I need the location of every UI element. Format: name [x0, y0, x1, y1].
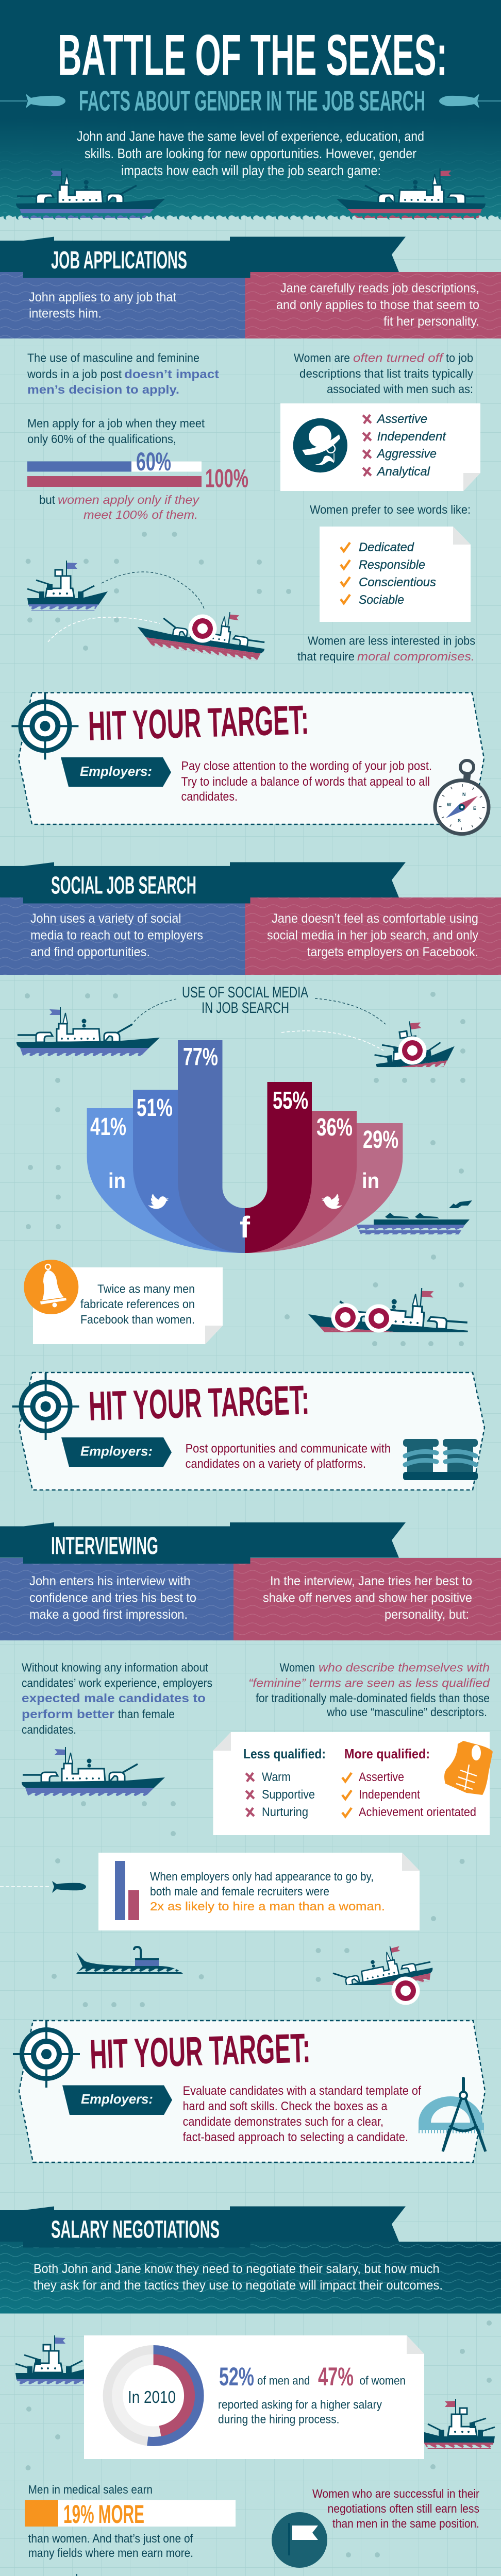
icon: target	[11, 692, 78, 759]
icon: red ship	[414, 2399, 495, 2449]
text: fabricated references: Twice as many men	[97, 1282, 195, 1295]
icon: compass: W	[447, 802, 452, 807]
heading: hit your target: HIT YOUR TARGET:	[88, 1377, 310, 1429]
text: employers advice: Evaluate candidates with a standard template of	[183, 2084, 421, 2098]
chart value labels	[90, 1044, 398, 1154]
panel: John interview: make a good first impression.	[29, 1607, 188, 1622]
text: masculine and feminine words: doesn’t impact	[124, 367, 219, 381]
text: feminine terms: who describe themselves with	[319, 1661, 490, 1674]
women: Twitter 36%	[245, 1111, 357, 1253]
card: masculine traits	[280, 403, 480, 491]
text: employers advice	[181, 759, 432, 804]
text: women earn less: than men in the same position.	[332, 2517, 479, 2530]
text: male candidates expected: Without knowing any information about	[22, 1661, 208, 1674]
tag: employers	[62, 2086, 172, 2115]
icon: protractor and dividers	[419, 2078, 486, 2151]
tag: employers: Employers:	[80, 1443, 153, 1459]
tag: employers	[61, 757, 171, 787]
text: 52 and 47 percent: reported asking for a higher salary	[218, 2398, 382, 2411]
text: appearance statistic: 2x as likely to hire a man than a woman.	[150, 1900, 385, 1913]
banner: interviewing: INTERVIEWING	[51, 1533, 158, 1560]
text: masculine and feminine words: men’s decision to apply.	[27, 383, 179, 396]
text: masculine and feminine words: The use of masculine and feminine	[27, 351, 199, 365]
text: masculine and feminine words: words in a job post	[27, 367, 122, 381]
text: feminine terms: who use “masculine” descriptors.	[326, 1705, 487, 1719]
panel: John social: John uses a variety of social	[30, 911, 181, 926]
icon: left torpedo	[0, 94, 65, 108]
text: women turned off: to job	[446, 351, 473, 365]
social platform icons	[108, 1168, 379, 1244]
panel: Jane applies: Jane carefully reads job descriptions,	[280, 281, 479, 296]
text: moral compromises: moral compromises.	[357, 650, 475, 663]
icon: sinking red ship	[333, 1946, 433, 2005]
panel: John applies: John applies to any job that	[29, 290, 176, 304]
text: women turned off: descriptions that list traits typically	[299, 367, 473, 380]
stat: men in medical sales: 19% MORE	[63, 2500, 144, 2529]
illustration: ship battle	[27, 561, 269, 662]
panel: Jane interview	[233, 1558, 501, 1640]
stat: men in medical sales: many fields where men earn more.	[28, 2546, 193, 2560]
panel: Jane applies: and only applies to those that seem to	[276, 298, 479, 312]
panel: John social: and find opportunities.	[30, 945, 150, 959]
panel: Jane applies	[245, 272, 501, 338]
card: preferred words	[320, 527, 471, 622]
tag: employers	[61, 1437, 172, 1467]
card: preferred words: Dedicated	[359, 540, 414, 554]
chart title: IN JOB SEARCH	[202, 999, 289, 1016]
women: Facebook 55%	[245, 1082, 312, 1253]
text: moral compromises	[297, 634, 475, 663]
list: masculine traits: Independent	[377, 430, 446, 444]
text: feminine terms: Women	[279, 1661, 315, 1674]
bar chart: 60% vs 100%: 100%	[205, 464, 248, 493]
card: preferred words: Conscientious	[359, 575, 436, 589]
icon: red ship	[337, 168, 486, 218]
panel: salary intro: they ask for and the tactics they use to negotiate will impact their outcomes.	[34, 2278, 443, 2293]
text: appearance statistic: both male and female recruiters were	[150, 1885, 329, 1898]
section: job applications	[0, 237, 501, 663]
panel: hit your target 1	[11, 692, 489, 834]
icon: sinking red ship with two hits	[308, 1288, 468, 1332]
icon: sinking red ship	[374, 1021, 455, 1067]
card: preferred words: Sociable	[359, 593, 404, 607]
chart: social media U chart	[87, 1040, 403, 1253]
arcs: shots	[134, 998, 386, 1050]
wave border	[0, 213, 501, 219]
donut chart	[108, 2350, 199, 2442]
panel: John interview	[0, 1558, 233, 1640]
panel: Jane social: targets employers on Facebook.	[307, 945, 478, 959]
panel: hit your target 2	[12, 1372, 485, 1490]
text: women apply at 100%: meet 100% of them.	[84, 508, 198, 521]
intro text: John and Jane have the same level of experience, education, and	[77, 129, 424, 144]
stat: men in medical sales: than women. And that’s just one of	[28, 2532, 193, 2545]
icon: bell	[24, 1260, 78, 1314]
intro text	[77, 129, 424, 178]
text: moral compromises: Women are less interested in jobs	[308, 634, 475, 647]
men: Twitter 51%	[133, 1090, 245, 1253]
chart title: USE OF SOCIAL MEDIA	[182, 984, 308, 1001]
list: more qualified: Independent	[359, 1788, 420, 1802]
social platform icons: in	[108, 1168, 126, 1193]
chart value labels: 29%	[363, 1126, 398, 1154]
text: women turned off: often turned off	[353, 351, 444, 365]
bar chart: 60% vs 100%: 60%	[136, 447, 171, 476]
text: male candidates expected: expected male candidates to	[22, 1691, 206, 1705]
banner: interviewing	[0, 1522, 406, 1564]
text: 52 and 47 percent: during the hiring process.	[218, 2412, 339, 2426]
mini bar chart	[115, 1861, 139, 1920]
text: male candidates expected	[22, 1661, 212, 1736]
text: fabricated references: fabricate references on	[80, 1297, 195, 1311]
banner: social job search	[0, 862, 406, 904]
text: feminine terms	[248, 1661, 490, 1719]
text: 52 and 47 percent: of men and	[257, 2374, 310, 2387]
icon: target	[13, 2021, 80, 2088]
list: less qualified	[246, 1770, 315, 1819]
icon: target	[12, 1373, 79, 1440]
text: appearance statistic	[150, 1870, 385, 1913]
text: men apply at 60%: only 60% of the qualifications,	[27, 432, 176, 446]
list: masculine traits: Assertive	[376, 412, 427, 426]
text: male candidates expected: than female	[118, 1707, 175, 1721]
men: LinkedIn 41%	[87, 1108, 245, 1253]
text: appearance statistic: When employers only had appearance to go by,	[150, 1870, 374, 1883]
text: 52 and 47 percent	[218, 2362, 406, 2426]
panel: John interview: confidence and tries his best to	[29, 1591, 196, 1605]
text: employers advice: Pay close attention to the wording of your job post.	[181, 759, 432, 773]
tag: employers: Employers:	[80, 764, 152, 779]
list: more qualified: Assertive	[359, 1770, 404, 1784]
card: preferred words: Responsible	[359, 558, 425, 572]
icon: compass: E	[473, 806, 476, 811]
social platform icons: in	[362, 1168, 379, 1193]
panel: John social	[0, 897, 245, 975]
text: 52 and 47 percent: 52%	[219, 2362, 254, 2391]
icon: right torpedo	[439, 94, 501, 108]
icon: compass	[435, 760, 489, 834]
text: men apply at 60%: Men apply for a job when they meet	[27, 417, 205, 430]
icon: blue ship	[33, 2574, 176, 2576]
tag: employers: Employers:	[81, 2091, 153, 2107]
icon: compass: S	[458, 818, 461, 823]
panel: Jane applies: fit her personality.	[383, 314, 479, 329]
text: masculine and feminine words	[27, 351, 219, 396]
text: men apply at 60%	[27, 417, 205, 446]
text: women turned off: Women are	[294, 351, 350, 365]
women: LinkedIn 29%	[245, 1123, 403, 1253]
chart value labels: 55%	[273, 1087, 308, 1114]
header band	[0, 0, 501, 219]
text: 52 and 47 percent: of women	[360, 2374, 406, 2387]
text: male candidates expected: candidates.	[22, 1723, 76, 1736]
donut chart: In 2010	[128, 2387, 176, 2406]
panel: Jane social	[245, 897, 501, 975]
list: masculine traits	[363, 412, 446, 479]
list: masculine traits: Aggressive	[376, 447, 437, 461]
stat: men in medical sales	[25, 2483, 236, 2560]
card: 2010 statistic	[84, 2335, 424, 2459]
list: more qualified: Achievement orientated	[359, 1805, 476, 1819]
banner: job applications: JOB APPLICATIONS	[51, 247, 187, 274]
text: employers advice: Post opportunities and communicate with	[186, 1442, 391, 1456]
panel: Jane interview: In the interview, Jane tries her best to	[270, 1574, 472, 1588]
icon: life vest	[444, 1741, 493, 1795]
banner: job applications	[0, 237, 406, 278]
list: less qualified: Supportive	[262, 1788, 315, 1802]
panel: Jane social: Jane doesn’t feel as comfortable using	[272, 911, 478, 926]
stat: men in medical sales: Men in medical sales earn	[28, 2483, 153, 2496]
text: women prefer: Women prefer to see words like:	[310, 503, 471, 516]
icon: aircraft carrier	[356, 1200, 472, 1234]
chart value labels: 51%	[137, 1094, 173, 1122]
chart value labels: 77%	[183, 1044, 218, 1071]
panel: John applies: interests him.	[29, 307, 102, 321]
text: women turned off: associated with men such as:	[327, 382, 473, 396]
panel: Jane interview: personality, but:	[385, 1607, 469, 1622]
icon: mooring bollards	[403, 1439, 478, 1480]
heading: hit your target: HIT YOUR TARGET:	[88, 697, 309, 749]
text: women turned off	[294, 351, 473, 396]
panel: John applies	[0, 272, 245, 338]
social platform icons: f	[240, 1211, 250, 1244]
chart value labels: 41%	[90, 1113, 126, 1141]
text: male candidates expected: perform better	[22, 1707, 114, 1721]
text: employers advice: candidates on a variety of platforms.	[186, 1457, 366, 1471]
text: women apply at 100%	[39, 493, 199, 521]
text: fabricated references	[80, 1282, 195, 1326]
panel: salary intro	[0, 2242, 501, 2313]
text: women apply at 100%: women apply only if they	[58, 493, 199, 506]
panel: Jane social: social media in her job search, and only	[267, 928, 478, 943]
icon: blue ship	[15, 2335, 96, 2385]
card: less and more qualified	[213, 1732, 493, 1835]
icon: blue ship	[22, 1747, 165, 1797]
icon: man with bowler hat and monocle	[293, 418, 347, 472]
text: feminine terms: “feminine” terms are seen as less qualified	[248, 1676, 490, 1690]
panel: John social: media to reach out to employers	[30, 928, 203, 943]
banner: salary negotiations: SALARY NEGOTIATIONS	[51, 2216, 220, 2244]
icon: sinking red ship with two hits	[345, 2567, 489, 2576]
panel: John interview: John enters his interview with	[29, 1574, 191, 1588]
intro text: impacts how each will play the job search game:	[121, 163, 381, 178]
banner: social job search: SOCIAL JOB SEARCH	[51, 872, 196, 900]
icon: submarine	[76, 1947, 183, 1974]
section: social job search	[0, 862, 501, 1347]
icon: torpedo	[0, 1881, 86, 1893]
section: salary negotiations	[0, 2206, 501, 2576]
banner: salary negotiations	[0, 2206, 406, 2247]
icon: blue ship	[16, 168, 165, 218]
icon: blue ship	[16, 1007, 160, 1057]
text: employers advice	[186, 1442, 391, 1471]
text: women earn less: Women who are successful in their	[312, 2487, 479, 2500]
heading: more qualified: More qualified:	[344, 1746, 430, 1761]
men: Facebook 77%	[178, 1040, 245, 1253]
list: less qualified: Warm	[262, 1770, 291, 1784]
bar chart: 60% vs 100%	[27, 447, 248, 493]
list: more qualified	[342, 1770, 476, 1819]
heading: less qualified: Less qualified:	[243, 1746, 326, 1761]
text: fabricated references: Facebook than women.	[80, 1313, 195, 1326]
panel: hit your target 3	[13, 2021, 486, 2162]
panel: salary intro: Both John and Jane know they need to negotiate their salary, but how much	[34, 2262, 439, 2276]
text: 52 and 47 percent: 47%	[318, 2362, 354, 2391]
card: 2x as likely	[98, 1853, 420, 1930]
text: employers advice: candidates.	[181, 790, 238, 804]
chart title	[182, 984, 308, 1016]
list: masculine traits: Analytical	[376, 465, 430, 479]
list: less qualified: Nurturing	[262, 1805, 308, 1819]
text: employers advice: hard and soft skills. Check the boxes as a	[183, 2099, 388, 2113]
text: moral compromises: that require	[297, 650, 355, 663]
section: interviewing	[0, 1522, 501, 2005]
text: women apply at 100%: but	[39, 493, 55, 506]
panel: Jane interview: shake off nerves and show her positive	[263, 1591, 472, 1605]
intro text: skills. Both are looking for new opportunities. However, gender	[85, 146, 416, 161]
icon: compass: N	[462, 792, 466, 797]
text: employers advice: fact-based approach to selecting a candidate.	[183, 2130, 408, 2144]
text: employers advice	[183, 2084, 421, 2144]
text: male candidates expected: candidates’ work experience, employers	[22, 1676, 212, 1690]
text: women earn less: negotiations often still earn less	[328, 2502, 479, 2515]
text: employers advice: Try to include a balance of words that appeal to all	[181, 775, 430, 789]
text: women earn less	[312, 2487, 479, 2530]
card: fabricated references	[24, 1260, 223, 1344]
chart value labels: 36%	[316, 1114, 353, 1141]
text: employers advice: candidate demonstrates such for a clear,	[183, 2115, 383, 2129]
icon: white flag	[272, 2512, 327, 2568]
heading: hit your target: HIT YOUR TARGET:	[89, 2025, 311, 2077]
